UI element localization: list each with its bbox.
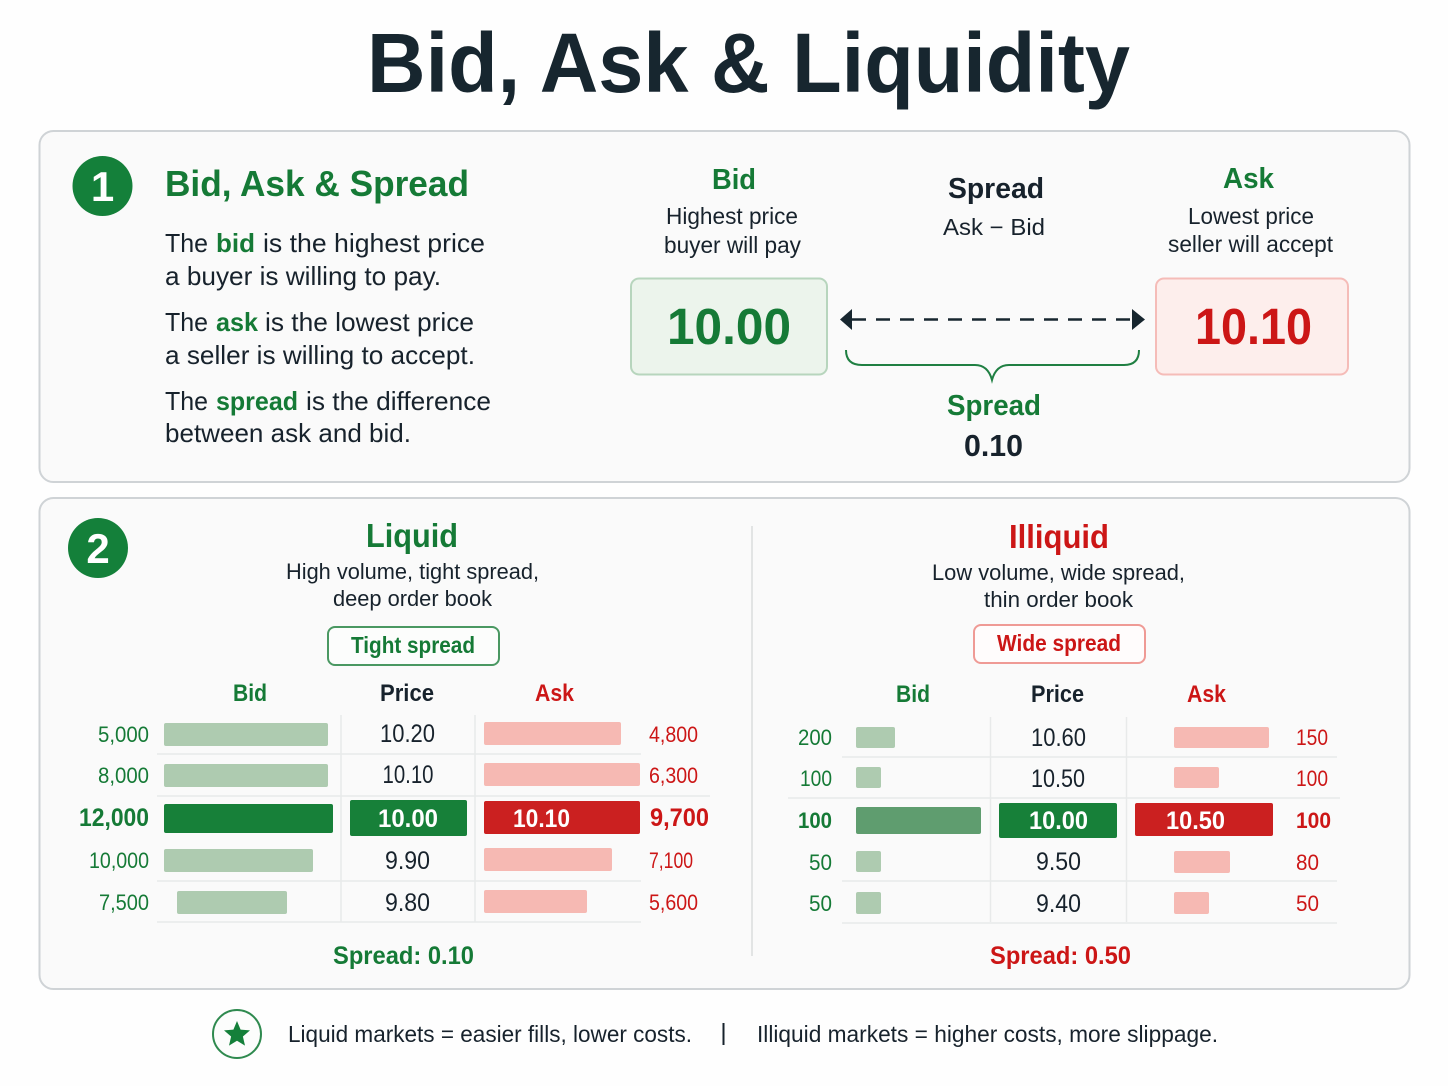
text block: definitions: a buyer is willing to pay. bbox=[165, 261, 441, 291]
column headers: Ask bbox=[535, 680, 575, 707]
bid sizes: 5,000 bbox=[98, 722, 149, 747]
liquid heading: deep order book bbox=[333, 586, 493, 611]
bid sizes bbox=[798, 725, 832, 916]
price ladder: 9.50 bbox=[1036, 848, 1081, 876]
liquid heading bbox=[286, 517, 539, 611]
title: Bid, Ask & Liquidity bbox=[367, 16, 1130, 110]
bid depth bars bbox=[164, 723, 333, 914]
takeaway: liquid markets: Liquid markets = easier fills, lower costs. bbox=[288, 1021, 692, 1047]
ask label: seller will accept bbox=[1168, 231, 1334, 257]
ask sizes: 50 bbox=[1296, 891, 1319, 916]
column headers: Price bbox=[1031, 681, 1084, 708]
best ask bar: 10.10 bbox=[513, 805, 570, 833]
column headers bbox=[896, 681, 1227, 708]
text block: definitions: between ask and bid. bbox=[165, 418, 411, 448]
spread formula label: Spread bbox=[948, 173, 1044, 205]
takeaway: illiquid markets: Illiquid markets = higher costs, more slippage. bbox=[757, 1021, 1218, 1047]
bid sizes: 50 bbox=[809, 850, 832, 875]
ask price box: 10.10 bbox=[1195, 298, 1312, 355]
spread value: Spread bbox=[947, 390, 1041, 422]
text block: definitions: is the difference bbox=[306, 386, 491, 416]
column headers bbox=[233, 680, 575, 707]
text block: definitions: The bbox=[165, 307, 208, 337]
panel: bid, ask and spread bbox=[40, 131, 1410, 482]
order book: illiquid bbox=[788, 681, 1340, 923]
price ladder bbox=[350, 720, 467, 917]
column headers: Bid bbox=[233, 680, 267, 707]
order book: liquid bbox=[79, 680, 710, 922]
text block: definitions: The bbox=[165, 386, 208, 416]
ask sizes bbox=[649, 722, 709, 915]
bid sizes: 12,000 bbox=[79, 804, 149, 832]
bid label bbox=[664, 164, 801, 258]
liquid heading: Liquid bbox=[366, 517, 458, 554]
ask sizes: 150 bbox=[1296, 725, 1328, 750]
text block: definitions: a seller is willing to accept. bbox=[165, 340, 475, 370]
ask sizes: 4,800 bbox=[649, 722, 698, 747]
bid sizes bbox=[79, 722, 149, 915]
price ladder: 9.90 bbox=[385, 847, 430, 875]
illiquid column bbox=[788, 518, 1340, 970]
best ask bar bbox=[484, 801, 640, 834]
liquid column bbox=[79, 517, 710, 970]
ask sizes bbox=[1296, 725, 1331, 916]
bid sizes: 8,000 bbox=[98, 763, 149, 788]
badge: number 2 bbox=[68, 518, 128, 578]
ask price box bbox=[1156, 278, 1348, 374]
ask sizes: 6,300 bbox=[649, 763, 698, 788]
bid sizes: 200 bbox=[798, 725, 832, 750]
tag: wide spread bbox=[974, 625, 1145, 663]
text block: definitions: ask bbox=[216, 307, 259, 337]
illiquid heading: Illiquid bbox=[1009, 518, 1109, 555]
bid sizes: 7,500 bbox=[99, 890, 149, 915]
column headers: Price bbox=[380, 680, 434, 707]
ask label: Ask bbox=[1223, 163, 1275, 195]
tag: tight spread bbox=[328, 627, 499, 665]
ask depth bars bbox=[1174, 727, 1269, 914]
tag: wide spread: Wide spread bbox=[997, 630, 1121, 656]
best ask bar bbox=[1135, 803, 1273, 836]
brace bbox=[846, 350, 1139, 380]
tag: tight spread: Tight spread bbox=[351, 632, 475, 658]
price ladder: 10.00 bbox=[378, 805, 438, 833]
arrow: double-headed dashed bbox=[840, 309, 1145, 330]
bid price box bbox=[631, 278, 827, 374]
ask label bbox=[1168, 163, 1334, 257]
illiquid heading bbox=[932, 518, 1185, 612]
price ladder: 10.10 bbox=[382, 761, 434, 789]
text block: definitions bbox=[165, 228, 491, 448]
ask sizes: 7,100 bbox=[649, 848, 693, 873]
column headers: Ask bbox=[1187, 681, 1227, 708]
text block: definitions: spread bbox=[216, 386, 298, 416]
illiquid heading: thin order book bbox=[984, 587, 1134, 612]
price ladder: 10.50 bbox=[1031, 765, 1085, 793]
bid label: Highest price bbox=[666, 203, 798, 229]
badge: number 1 bbox=[72, 156, 132, 216]
price ladder: 9.80 bbox=[385, 889, 430, 917]
text block: definitions: is the highest price bbox=[263, 228, 485, 258]
ask sizes: 100 bbox=[1296, 808, 1331, 833]
ask sizes: 100 bbox=[1296, 766, 1328, 791]
badge: number 1: 1 bbox=[91, 163, 114, 210]
bid depth bars bbox=[856, 727, 981, 914]
text block: definitions: bid bbox=[216, 228, 255, 258]
text block: definitions: The bbox=[165, 228, 208, 258]
column headers: Bid bbox=[896, 681, 930, 708]
illiquid heading: Low volume, wide spread, bbox=[932, 560, 1185, 585]
ask label: Lowest price bbox=[1188, 203, 1314, 229]
spread result: illiquid: Spread: 0.50 bbox=[990, 942, 1131, 970]
bid sizes: 50 bbox=[809, 891, 832, 916]
price ladder: 10.00 bbox=[1029, 807, 1088, 835]
bid price box: 10.00 bbox=[667, 298, 791, 355]
spread formula label: Ask − Bid bbox=[943, 214, 1045, 240]
ask depth bars bbox=[484, 722, 640, 913]
heading: bid, ask and spread: Bid, Ask & Spread bbox=[165, 163, 469, 204]
price ladder: 9.40 bbox=[1036, 890, 1081, 918]
ask sizes: 80 bbox=[1296, 850, 1319, 875]
bid sizes: 100 bbox=[800, 766, 832, 791]
bid label: Bid bbox=[712, 164, 756, 196]
ask sizes: 5,600 bbox=[649, 890, 698, 915]
ask sizes: 9,700 bbox=[650, 804, 709, 832]
price ladder: 10.20 bbox=[380, 720, 435, 748]
icon: star in circle bbox=[213, 1010, 261, 1058]
best ask bar: 10.50 bbox=[1166, 807, 1225, 835]
footer takeaway bbox=[213, 1010, 1218, 1058]
price ladder: 10.60 bbox=[1031, 724, 1086, 752]
bid sizes: 100 bbox=[798, 808, 832, 833]
badge: number 2: 2 bbox=[86, 525, 110, 572]
panel: liquid vs illiquid bbox=[40, 498, 1410, 989]
spread result: liquid: Spread: 0.10 bbox=[333, 942, 474, 970]
price ladder bbox=[999, 724, 1117, 918]
bid label: buyer will pay bbox=[664, 232, 801, 258]
liquid heading: High volume, tight spread, bbox=[286, 559, 539, 584]
spread value bbox=[947, 390, 1041, 463]
bid sizes: 10,000 bbox=[89, 848, 149, 873]
spread formula label bbox=[943, 173, 1045, 240]
text block: definitions: is the lowest price bbox=[265, 307, 474, 337]
spread value: 0.10 bbox=[964, 428, 1023, 463]
